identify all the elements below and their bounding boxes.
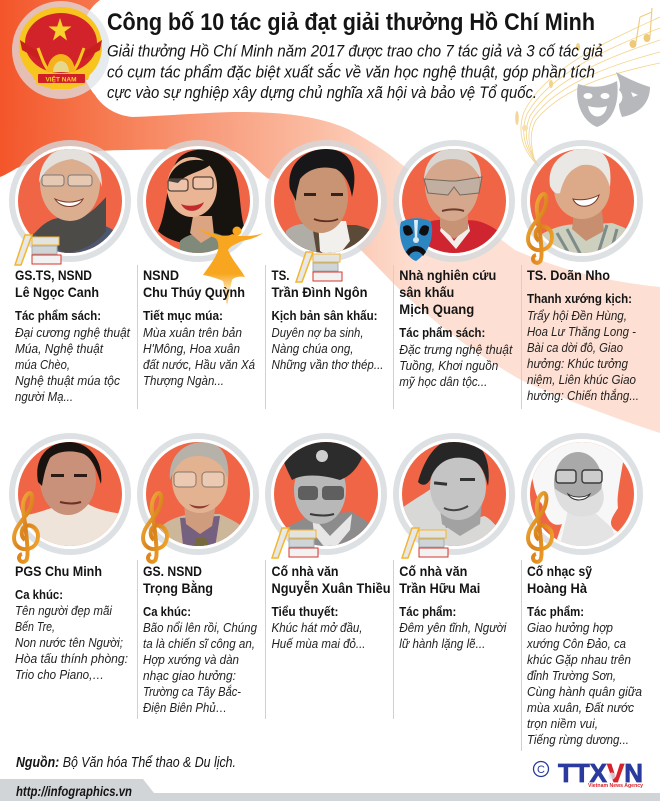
works: Tiểu thuyết: xyxy=(272,605,338,619)
icon: books xyxy=(296,252,342,282)
works: người Mạ... xyxy=(15,390,73,404)
name: Nguyễn Xuân Thiều xyxy=(272,581,390,596)
footer bar xyxy=(0,779,660,801)
portrait: Trọng Bằng xyxy=(140,436,256,554)
icon: national emblem of Vietnam: VIỆT NAM xyxy=(45,74,77,84)
works: xướng Côn Đảo, ca xyxy=(526,637,626,651)
works: Giao hưởng hợp xyxy=(527,621,613,635)
works: Những vần thơ thép... xyxy=(272,358,384,372)
title: Công bố 10 tác giả đạt giải thưởng Hồ Chí Minh xyxy=(107,9,595,36)
works xyxy=(143,605,257,715)
name: PGS Chu Minh xyxy=(15,564,102,579)
portrait: Nguyễn Xuân Thiều xyxy=(268,436,384,554)
name: Cố nhà văn xyxy=(399,564,467,579)
portrait: Hoàng Hà xyxy=(524,436,640,554)
works: Thượng Ngàn... xyxy=(143,374,224,388)
panel: Chu Thúy Quỳnh xyxy=(140,143,263,388)
works: Điện Biên Phủ… xyxy=(143,701,227,715)
name: TS. Doãn Nho xyxy=(527,268,610,283)
name: Cố nhạc sỹ xyxy=(527,564,592,579)
works xyxy=(272,309,384,372)
works: Hợp xướng và dàn xyxy=(143,653,239,667)
works: Tuồng, Khơi nguồn xyxy=(399,359,498,373)
works: Đêm yên tĩnh, Người xyxy=(399,621,507,635)
works: lữ hành lặng lẽ... xyxy=(399,637,485,651)
works: mỹ học dân tộc... xyxy=(399,375,487,389)
name: Lê Ngọc Canh xyxy=(15,285,99,300)
portrait: Trần Hữu Mai xyxy=(396,436,512,554)
icon: treble clef xyxy=(14,493,38,562)
works: Kịch bản sân khấu: xyxy=(272,309,378,323)
icon: treble clef xyxy=(143,493,167,562)
works: Huế mùa mai đỏ... xyxy=(272,637,366,651)
website url: http://infographics.vn xyxy=(16,784,132,799)
works: Non nước tên Người; xyxy=(15,636,123,650)
panel: Hoàng Hà xyxy=(524,436,642,747)
logo: TTXVN: Vietnam News Agency xyxy=(588,783,644,789)
works: Hoa Lư Thăng Long - xyxy=(527,325,636,339)
name xyxy=(399,268,496,317)
portrait: Doãn Nho xyxy=(524,143,640,261)
works xyxy=(272,605,366,651)
logo: TTXVN: TTXVN xyxy=(558,758,643,788)
name xyxy=(143,268,245,300)
works: nhạc giao hưởng: xyxy=(143,669,236,683)
name: TS. xyxy=(272,268,290,283)
works: Hòa tấu thính phòng: xyxy=(15,652,128,666)
name: NSND xyxy=(143,268,179,283)
portrait: Mịch Quang xyxy=(396,143,512,261)
works: hưởng: Khúc tưởng xyxy=(527,357,628,371)
icon: books xyxy=(402,528,448,558)
name: GS.TS, NSND xyxy=(15,268,92,283)
name xyxy=(399,564,480,596)
icon: dancer xyxy=(197,226,263,305)
name xyxy=(15,268,99,300)
works: hưởng: Chiến thắng... xyxy=(527,388,639,403)
name: Mịch Quang xyxy=(399,302,474,317)
works: Trường ca Tây Bắc- xyxy=(143,684,241,699)
works xyxy=(527,292,639,403)
icon: theatre masks xyxy=(577,72,650,127)
works: Trio cho Piano,… xyxy=(15,668,104,682)
works: Khúc hát mở đầu, xyxy=(272,621,362,635)
name: Hoàng Hà xyxy=(527,581,587,596)
portrait: Trần Đình Ngôn xyxy=(268,143,384,261)
portrait: Chu Thúy Quỳnh xyxy=(140,143,256,261)
works: khúc Gặp nhau trên xyxy=(527,653,631,667)
icon: national emblem of Vietnam xyxy=(12,1,110,99)
works: Ca khúc: xyxy=(15,588,63,602)
works xyxy=(399,326,513,389)
works: Cùng hành quân giữa xyxy=(527,685,642,699)
works: Tác phẩm sách: xyxy=(399,326,485,340)
name: Trọng Bằng xyxy=(143,581,213,596)
works: Thanh xướng kịch: xyxy=(527,292,632,306)
works: Nàng chúa ong, xyxy=(272,342,354,356)
icon: treble clef xyxy=(528,194,552,263)
works: Bão nổi lên rồi, Chúng xyxy=(143,621,257,635)
panel: Doãn Nho xyxy=(524,143,640,403)
source line: Nguồn: Bộ Văn hóa Thể thao & Du lịch. xyxy=(16,755,236,771)
panel: Trần Đình Ngôn xyxy=(268,143,384,372)
portrait: Lê Ngọc Canh xyxy=(12,143,128,261)
works xyxy=(15,309,130,404)
works: Tác phẩm: xyxy=(527,605,584,619)
panel: Nguyễn Xuân Thiều xyxy=(268,436,390,651)
works: đỉnh Trường Sơn, xyxy=(527,669,616,683)
works xyxy=(143,309,255,388)
works: Nghệ thuật múa tộc xyxy=(15,374,121,388)
background: orange gradient wave xyxy=(0,0,660,433)
works: múa Chèo, xyxy=(15,358,70,372)
icon: opera mask xyxy=(400,218,432,261)
works: Mùa xuân trên bản xyxy=(143,326,242,340)
works: H'Mông, Hoa xuân xyxy=(143,342,240,356)
intro paragraph xyxy=(107,42,603,102)
works: đất nước, Hầu văn Xá xyxy=(143,358,255,372)
name: Chu Thúy Quỳnh xyxy=(143,285,245,300)
name: Nhà nghiên cứu xyxy=(399,268,496,283)
panel: Trần Hữu Mai xyxy=(396,436,512,651)
works xyxy=(399,605,507,651)
portrait: Chu Minh xyxy=(12,436,128,554)
works: Trẩy hội Đền Hùng, xyxy=(527,309,627,323)
name: GS. NSND xyxy=(143,564,202,579)
works xyxy=(526,605,642,747)
works: Đặc trưng nghệ thuật xyxy=(399,343,513,357)
works: ta là chiến sĩ công an, xyxy=(143,637,255,651)
works: Đại cương nghệ thuật xyxy=(15,326,130,340)
works: Tiếng rừng dương... xyxy=(527,733,629,747)
works: Tác phẩm: xyxy=(399,605,456,619)
logo: TTXVN: C xyxy=(537,764,545,776)
name: Trần Hữu Mai xyxy=(399,581,480,596)
works: Bài ca dời đô, Giao xyxy=(527,341,623,355)
works: trọn niềm vui, xyxy=(527,717,598,731)
works: Ca khúc: xyxy=(143,605,191,619)
panel: Mịch Quang xyxy=(396,143,513,389)
name xyxy=(272,268,368,300)
works: Duyên nợ ba sinh, xyxy=(272,326,364,340)
name xyxy=(143,564,213,596)
intro paragraph: cực vào sự nghiệp xây dựng chủ nghĩa xã hội và bảo vệ Tổ quốc. xyxy=(107,84,537,102)
works: niệm, Liên khúc Giao xyxy=(527,373,636,387)
panel: Lê Ngọc Canh xyxy=(12,143,130,404)
name xyxy=(272,564,390,596)
panel: Trọng Bằng xyxy=(140,436,257,715)
panel: Chu Minh xyxy=(12,436,128,682)
works: Tên người đẹp mãi xyxy=(15,604,113,618)
works: Múa, Nghệ thuật xyxy=(15,342,103,356)
icon: books xyxy=(272,528,318,558)
name: Cố nhà văn xyxy=(272,564,338,579)
works: Tiết mục múa: xyxy=(143,309,223,323)
intro paragraph: có cụm tác phẩm đặc biệt xuất sắc về văn học nghệ thuật, góp phần tích xyxy=(107,62,595,82)
works xyxy=(15,588,128,682)
name: Trần Đình Ngôn xyxy=(272,285,368,300)
name xyxy=(527,564,592,596)
name: sân khấu xyxy=(399,285,454,300)
works: mùa xuân, Đất nước xyxy=(527,701,635,715)
works: Bến Tre, xyxy=(15,620,55,634)
decoration: golden music staff xyxy=(515,8,660,172)
icon: treble clef xyxy=(528,493,552,562)
intro paragraph: Giải thưởng Hồ Chí Minh năm 2017 được trao cho 7 tác giả và 3 cố tác giả xyxy=(107,42,603,60)
works: Tác phẩm sách: xyxy=(15,309,101,323)
icon: books xyxy=(15,235,61,265)
